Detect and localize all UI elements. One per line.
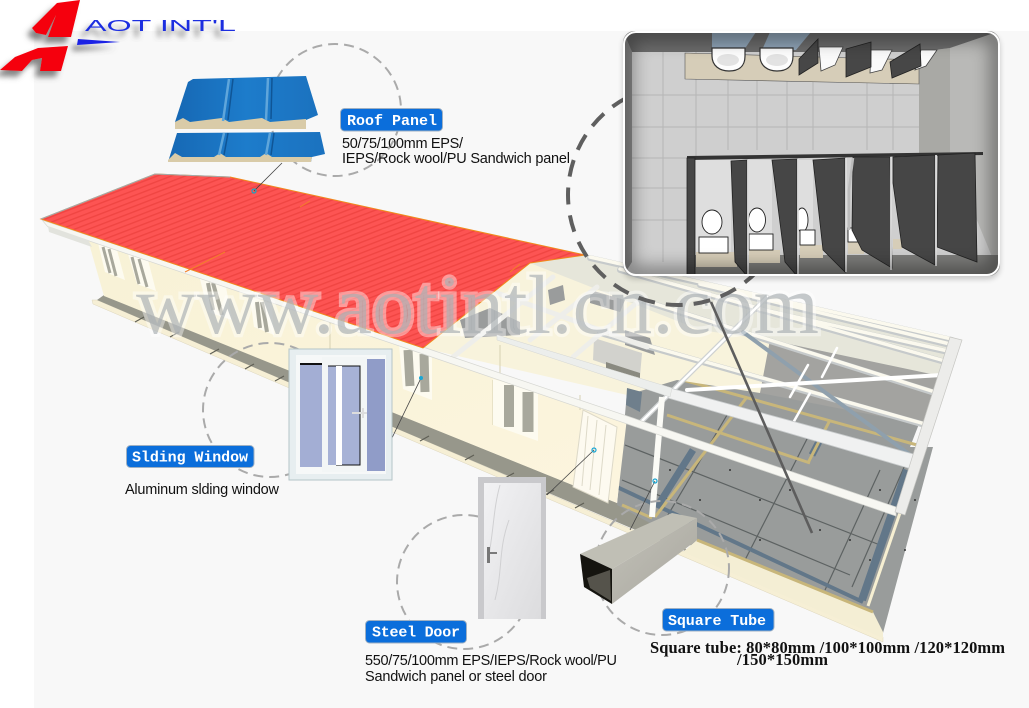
steel door label bbox=[366, 620, 466, 643]
roof panel description: 50/75/100mm EPS/ bbox=[342, 136, 464, 152]
square tube description: Square tube: 80*80mm /100*100mm /120*120mm bbox=[650, 638, 1005, 657]
watermark: www.aotintl.cn.com bbox=[136, 259, 819, 352]
sliding window leader bbox=[391, 376, 423, 440]
steel door description: Sandwich panel or steel door bbox=[365, 669, 547, 685]
roof bbox=[41, 174, 585, 348]
sliding window callout bbox=[125, 343, 423, 498]
square tube image bbox=[580, 513, 697, 604]
sliding window dashed circle bbox=[203, 343, 337, 477]
big truss beam bbox=[668, 388, 917, 470]
interior blue shadow bbox=[626, 388, 642, 412]
upper truss area bbox=[530, 255, 952, 377]
column post bbox=[652, 397, 662, 517]
side walls bbox=[919, 48, 950, 155]
urinal partitions bbox=[799, 39, 921, 78]
floor slab bbox=[617, 340, 940, 633]
sliding window label: Slding Window bbox=[132, 450, 248, 466]
vignette bbox=[623, 31, 1000, 276]
toilets bbox=[696, 208, 902, 267]
foundation rim bbox=[92, 300, 883, 642]
mirrors bbox=[712, 33, 756, 48]
floor band below stalls bbox=[687, 255, 1000, 276]
logo wordmark: AOT INT'L bbox=[85, 18, 237, 35]
roof panel leader bbox=[252, 163, 282, 193]
roof panel dashed circle bbox=[269, 44, 401, 176]
stall frames and doors bbox=[687, 153, 977, 276]
bathroom inset bbox=[623, 31, 1000, 279]
right frame bbox=[895, 337, 962, 515]
steel door callout bbox=[365, 448, 617, 685]
roof panel callout bbox=[168, 76, 570, 193]
rear cream wall bbox=[423, 255, 770, 395]
steel door leader bbox=[547, 448, 596, 495]
sliding window description: Aluminum slding window bbox=[125, 482, 280, 498]
steel door description: 550/75/100mm EPS/IEPS/Rock wool/PU bbox=[365, 653, 617, 669]
logo mark bbox=[0, 0, 120, 71]
foundation gray strip bbox=[97, 295, 690, 553]
floor details bbox=[617, 380, 925, 612]
logo bbox=[0, 0, 237, 71]
sinks bbox=[712, 48, 793, 71]
slab cream edge bbox=[683, 540, 883, 638]
wall bbox=[88, 240, 627, 503]
rear gray panels bbox=[760, 340, 945, 425]
wall door bbox=[573, 410, 617, 503]
square tube description: /150*150mm bbox=[736, 650, 828, 669]
trusses bbox=[453, 257, 952, 457]
eave beam bbox=[42, 220, 896, 516]
stall rail bbox=[687, 152, 983, 160]
roof panel description: IEPS/Rock wool/PU Sandwich panel bbox=[342, 151, 570, 167]
urinals bbox=[819, 47, 937, 73]
tiled floor bbox=[628, 52, 988, 276]
steel door dashed circle bbox=[397, 515, 531, 649]
steel door image bbox=[478, 477, 546, 619]
square tube dashed circle bbox=[595, 501, 729, 635]
square tube label: Square Tube bbox=[668, 613, 766, 630]
roof panel label: Roof Panel bbox=[347, 113, 437, 130]
stall interiors bbox=[695, 160, 813, 255]
soffit bbox=[48, 226, 92, 247]
roof panel image bbox=[168, 76, 325, 162]
counter bbox=[685, 53, 919, 84]
bathroom callout circle and pointer bbox=[568, 85, 812, 533]
steel door label: Steel Door bbox=[372, 624, 460, 642]
square tube leader bbox=[630, 479, 657, 530]
house illustration bbox=[41, 174, 962, 642]
top dark band bbox=[623, 31, 1000, 52]
sliding window image bbox=[289, 349, 392, 480]
square tube callout bbox=[580, 479, 1005, 669]
square tube label bbox=[662, 608, 774, 631]
room opening bbox=[593, 338, 642, 376]
wall windows bbox=[98, 243, 538, 441]
roof panel label bbox=[340, 108, 442, 131]
